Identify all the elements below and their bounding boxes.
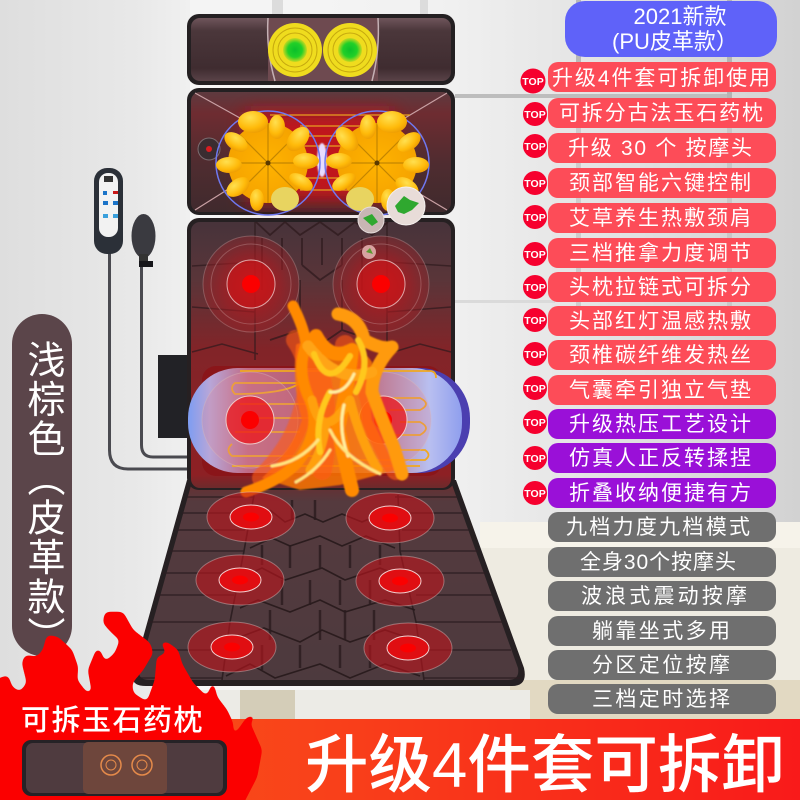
bottom banner: 升级4件套可拆卸	[305, 731, 785, 800]
massage wheel: left	[216, 111, 320, 215]
badge 13	[523, 481, 547, 505]
seams	[192, 222, 451, 360]
feature 3: 升级 30 个 按摩头	[568, 137, 752, 160]
feature 3	[548, 133, 776, 163]
badge 10	[523, 376, 547, 400]
feature 18: 分区定位按摩	[592, 654, 730, 677]
badge 3	[523, 134, 547, 158]
feature 1: 升级4件套可拆卸使用	[552, 67, 770, 90]
center hexagon quilting	[222, 495, 424, 680]
mat lower section	[132, 480, 525, 686]
badge 4: TOP	[524, 178, 546, 190]
flame effect center	[246, 306, 402, 492]
feature 10: 气囊牵引独立气垫	[569, 379, 751, 402]
airbag with heating wire	[188, 368, 470, 473]
point row 3 right	[364, 623, 452, 673]
badge 6: TOP	[524, 249, 546, 261]
remote control with cable	[94, 168, 190, 469]
feature 7: 头枕拉链式可拆分	[569, 276, 751, 299]
badge 7	[523, 275, 547, 299]
feature 9: 颈椎碳纤维发热丝	[569, 344, 751, 367]
point row 2 left	[196, 555, 284, 605]
feature 12	[548, 443, 776, 473]
point row 1 left	[207, 492, 295, 542]
feature 19	[548, 684, 776, 714]
feature 16	[548, 581, 776, 611]
feature list	[548, 62, 776, 714]
feature 11	[548, 409, 776, 439]
model title pill: (PU皮革款）	[612, 29, 738, 54]
badge 12: TOP	[524, 453, 546, 465]
feature 5	[548, 203, 776, 233]
mat upper body section	[187, 218, 455, 490]
jade circle left	[268, 23, 322, 77]
badge 13: TOP	[524, 488, 546, 500]
storage pouch	[158, 355, 190, 438]
feature 6	[548, 238, 776, 268]
massage points lower six	[188, 492, 452, 673]
herb bubbles	[358, 187, 425, 259]
head pillow with jade circles	[187, 14, 455, 85]
badge 1: TOP	[522, 76, 544, 88]
jade circle right	[323, 23, 377, 77]
remote body	[94, 168, 123, 254]
feature 17	[548, 616, 776, 646]
badge 4	[523, 171, 547, 195]
feature 14: 九档力度九档模式	[566, 516, 750, 539]
model title pill: 2021新款	[634, 4, 726, 29]
feature 17: 躺靠坐式多用	[592, 620, 730, 643]
color label pill: 浅棕色（皮革款）	[21, 340, 65, 656]
feature 18	[548, 650, 776, 680]
badge 2: TOP	[524, 109, 546, 121]
badge 3: TOP	[524, 141, 546, 153]
feature 4: 颈部智能六键控制	[569, 172, 751, 195]
point row 1 right	[346, 493, 434, 543]
massage wheel: right	[325, 111, 429, 215]
feature 16: 波浪式震动按摩	[581, 585, 747, 608]
detachable pillow photo	[22, 740, 227, 796]
badge 6	[523, 242, 547, 266]
cable: remote	[110, 250, 190, 469]
feature 15	[548, 547, 776, 577]
point row 3 left	[188, 622, 276, 672]
massage point: upper right	[333, 236, 429, 332]
color label pill	[12, 314, 72, 656]
feature 8: 头部红灯温感热敷	[569, 310, 751, 333]
feature 14	[548, 512, 776, 542]
badge 5	[523, 205, 547, 229]
feature 8	[548, 306, 776, 336]
badge 1	[520, 68, 546, 94]
feature 2	[548, 98, 776, 128]
feature 5: 艾草养生热敷颈肩	[569, 207, 751, 230]
feature 4	[548, 168, 776, 198]
badge 12	[523, 446, 547, 470]
feature 12: 仿真人正反转揉捏	[569, 447, 751, 470]
bottom banner	[0, 719, 800, 800]
control dial icon	[198, 138, 220, 160]
badge 7: TOP	[524, 282, 546, 294]
feature 19: 三档定时选择	[592, 688, 730, 711]
massage point: upper left	[203, 236, 299, 332]
badge 11	[523, 410, 547, 434]
feature 15: 全身30个按摩头	[580, 551, 736, 574]
feature 13: 折叠收纳便捷有方	[569, 482, 751, 505]
badge 8	[523, 308, 547, 332]
badge 9: TOP	[524, 349, 546, 361]
point row 2 right	[356, 556, 444, 606]
quilting seams left	[137, 497, 254, 678]
feature 9	[548, 340, 776, 370]
flame badge shape	[0, 612, 262, 800]
massage point: waist right	[335, 372, 431, 468]
massage point: waist left	[202, 372, 298, 468]
feature 7	[548, 272, 776, 302]
feature 6: 三档推拿力度调节	[569, 241, 751, 265]
badge 11: TOP	[524, 417, 546, 429]
feature 13	[548, 478, 776, 508]
quilting seams right	[395, 497, 520, 678]
feature 2: 可拆分古法玉石药枕	[559, 102, 763, 125]
model title pill	[565, 1, 777, 57]
badge 5: TOP	[524, 212, 546, 224]
badge 9	[523, 342, 547, 366]
air pump bulb with hose	[132, 214, 190, 457]
feature 11: 升级热压工艺设计	[569, 413, 751, 436]
badge 10: TOP	[524, 383, 546, 395]
badge 2	[523, 102, 547, 126]
detachable pillow caption: 可拆玉石药枕	[21, 704, 204, 737]
neck massage section	[187, 88, 455, 215]
badge 8: TOP	[524, 315, 546, 327]
TOP badges	[520, 68, 547, 505]
feature 10	[548, 375, 776, 405]
